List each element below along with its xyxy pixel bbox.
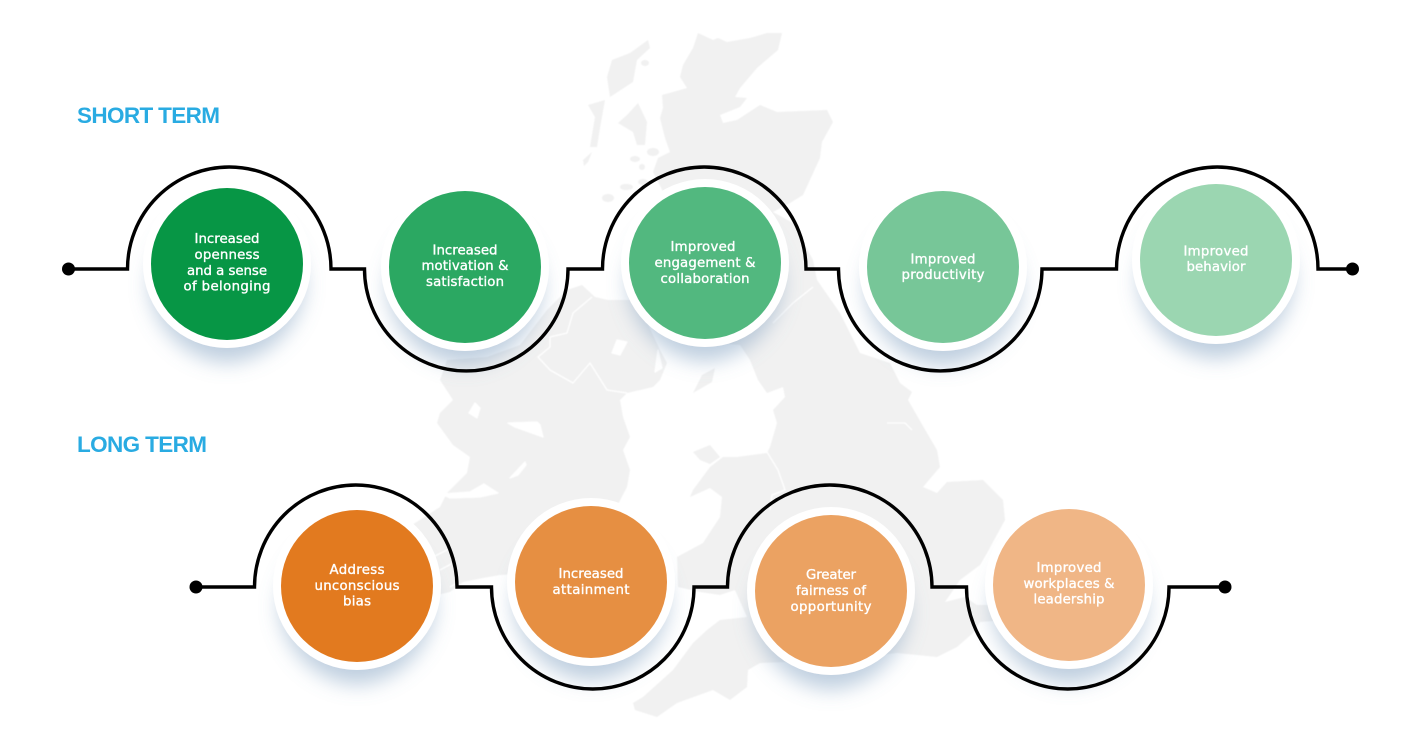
circle: improved engagement xyxy=(621,179,789,347)
circle: improved workplaces: leadership xyxy=(1034,592,1104,608)
section heading: long term: LONG TERM xyxy=(77,432,207,457)
circle: improved engagement: Improved xyxy=(670,240,736,255)
circle: greater fairness: fairness of xyxy=(796,584,866,599)
circle: improved workplaces: workplaces & xyxy=(1024,577,1114,592)
circle: greater fairness: Greater xyxy=(806,568,857,583)
circle: improved workplaces xyxy=(985,501,1153,669)
circle: increased attainment xyxy=(507,498,675,666)
circle: increased openness xyxy=(143,180,311,348)
circle: greater fairness: opportunity xyxy=(790,600,872,615)
circle: improved behavior: behavior xyxy=(1186,260,1246,275)
circle: increased motivation xyxy=(381,183,549,351)
circle: increased motivation: satisfaction xyxy=(426,275,504,290)
map: Ireland xyxy=(412,285,667,600)
circle: increased openness: Increased xyxy=(194,232,260,247)
circle: improved productivity: productivity xyxy=(902,268,985,283)
circle: increased motivation: motivation & xyxy=(422,259,508,274)
circle: address unconscious bias: Address xyxy=(330,563,385,578)
circle: improved productivity: Improved xyxy=(910,252,976,268)
map: islands xyxy=(583,40,720,464)
circle: increased openness: openness xyxy=(194,248,260,263)
background map of the UK and Ireland xyxy=(412,33,1005,717)
timeline: long term connector xyxy=(190,485,1232,689)
circle: address unconscious bias: unconscious xyxy=(314,579,400,594)
circle: improved behavior: Improved xyxy=(1184,244,1248,260)
circle: increased openness: of belonging xyxy=(184,280,270,294)
section heading: short term: SHORT TERM xyxy=(77,103,220,128)
circle: increased openness: and a sense xyxy=(187,264,267,279)
circle: address unconscious bias xyxy=(273,502,441,670)
circle: increased attainment: attainment xyxy=(552,583,630,598)
circle: improved engagement: engagement & xyxy=(654,256,756,271)
circle: greater fairness xyxy=(747,507,915,675)
circle: increased motivation: Increased xyxy=(432,244,498,258)
circle: increased attainment: Increased xyxy=(558,567,624,582)
circle: improved behavior xyxy=(1132,176,1300,344)
map: Great Britain xyxy=(633,33,1005,717)
circle: improved engagement: collaboration xyxy=(660,272,750,287)
circle: improved productivity xyxy=(859,183,1027,351)
circle: address unconscious bias: bias xyxy=(343,594,371,610)
timeline: short term connector xyxy=(62,167,1359,371)
circle: improved workplaces: Improved xyxy=(1036,561,1102,576)
map: land masses xyxy=(412,33,1005,717)
map: rivers, estuaries and borders xyxy=(433,287,912,587)
